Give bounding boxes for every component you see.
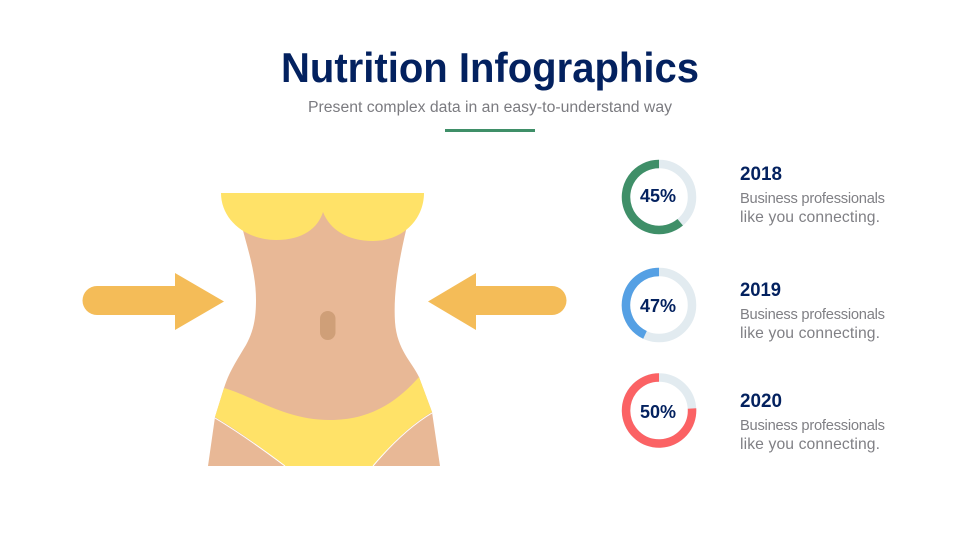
label: 2020: Business professionals: [740, 418, 885, 434]
label: 2019: like you connecting.: [740, 325, 880, 342]
label: 2018: Business professionals: [740, 191, 885, 207]
icon: right arrow pointing left: [428, 273, 566, 330]
label: 2019: Business professionals: [740, 307, 885, 323]
label: 2018: 2018: [740, 164, 782, 185]
label: 2020: 2020: [740, 391, 782, 412]
label: 2019: 2019: [740, 280, 781, 301]
icon: left arrow pointing right: [82, 273, 224, 330]
subtitle: Present complex data in an easy-to-understand way: [308, 99, 672, 116]
bikini bottom: [215, 377, 432, 466]
illustration: torso: [208, 193, 440, 466]
title underline: [445, 129, 535, 132]
donut: 2020 50%: 50%: [640, 402, 676, 422]
bikini edge highlights: [215, 413, 432, 466]
label: 2020: like you connecting.: [740, 436, 880, 453]
title: Nutrition Infographics: [281, 44, 699, 91]
label: 2020: [740, 391, 885, 453]
torso skin: [208, 200, 440, 466]
navel: [320, 311, 336, 340]
donut: 2019 47%: 47%: [640, 296, 676, 316]
label: 2018: [740, 164, 885, 226]
donut: 2020 50%: [626, 378, 692, 444]
donut: 2018 45%: 45%: [640, 186, 676, 206]
donut: 2019 47%: [626, 272, 692, 338]
donut: 2018 45%: [626, 164, 692, 230]
label: 2019: [740, 280, 885, 342]
bikini top: [221, 193, 424, 241]
label: 2018: like you connecting.: [740, 209, 880, 226]
